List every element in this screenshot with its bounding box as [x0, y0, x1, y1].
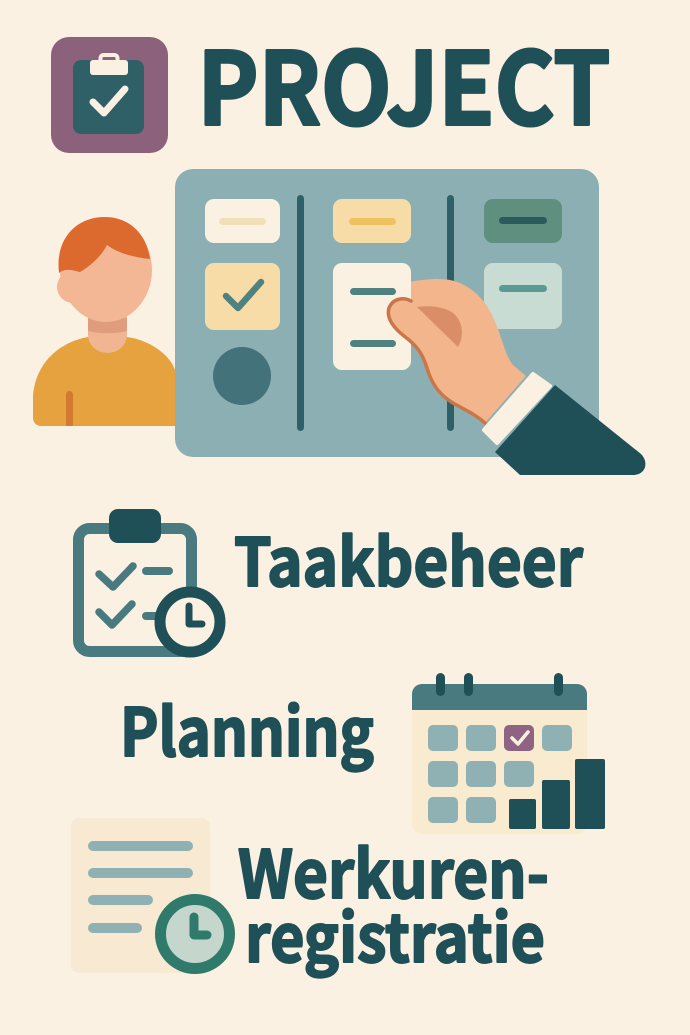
heading: Werkuren-registratie: registratie [245, 886, 545, 982]
heading: Taakbeheer: Taakbeheer [234, 510, 583, 606]
column 2 cards [333, 199, 411, 370]
hand [388, 299, 645, 475]
kanban board illustration [33, 169, 645, 475]
title: PROJECT [198, 8, 610, 154]
icon: task checklist with clock [78, 509, 220, 652]
column 3 cards [484, 199, 562, 329]
hand palm behind card [408, 279, 526, 423]
heading: Werkuren-registratie: Werkuren- [238, 822, 549, 918]
icon: timesheet document with clock [71, 818, 230, 973]
column 1 cards [205, 199, 280, 405]
icon: project clipboard [51, 37, 168, 153]
board [175, 169, 599, 457]
heading: Werkuren-registratie [238, 822, 549, 982]
icon: calendar with bars [412, 673, 605, 834]
person [33, 217, 175, 426]
heading: Planning: Planning [120, 680, 374, 776]
